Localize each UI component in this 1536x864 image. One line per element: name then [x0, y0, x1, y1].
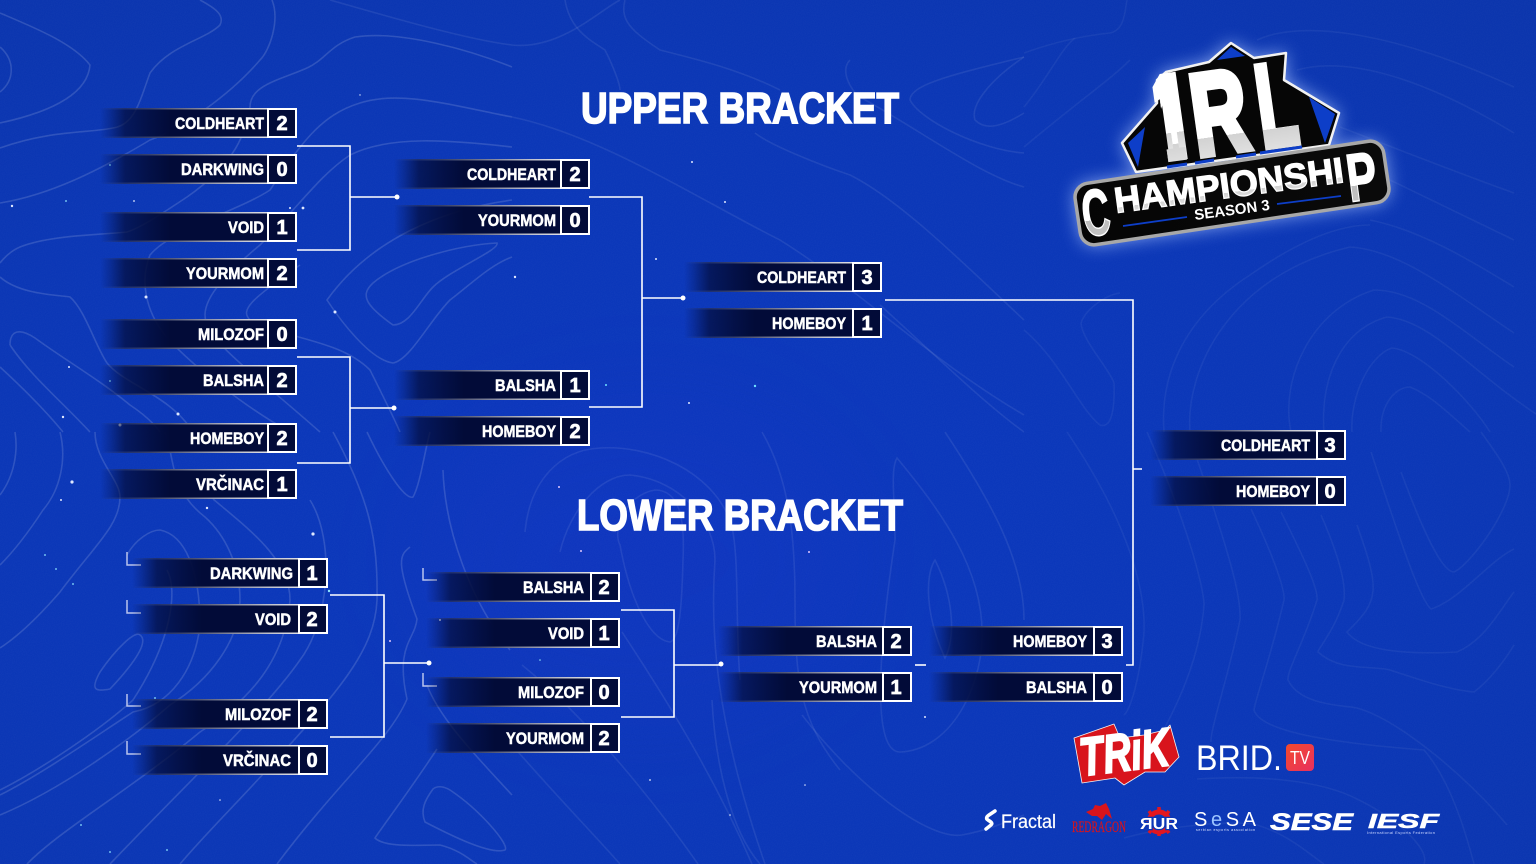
match row: Darkwing 1 [132, 558, 328, 588]
match row: Void 1: 1 [276, 217, 288, 239]
match row: Balsha 0: BALSHA [1026, 679, 1087, 697]
stars [11, 94, 926, 853]
match row: Homeboy 2: 2 [569, 421, 581, 443]
sponsor logo: Redragon [1072, 803, 1126, 836]
match row: Balsha 1 [394, 370, 590, 400]
match row: Homeboy 2: 2 [276, 428, 288, 450]
match row: Milozof 0: MILOZOF [198, 326, 264, 344]
match row: Homeboy 2: HOMEBOY [482, 423, 556, 441]
match row: Homeboy 2 [394, 416, 590, 446]
match row: Void 2: 2 [306, 609, 318, 631]
match row: Void 1 [426, 618, 620, 648]
match row: Darkwing 0 [100, 154, 297, 184]
logo: 1RL Championship Season 3: L [1248, 38, 1304, 172]
match row: Homeboy 0: 0 [1324, 481, 1336, 503]
match row: Void 2 [132, 604, 328, 634]
match row: Milozof 0: 0 [598, 682, 610, 704]
match row: Coldheart 2: 2 [276, 113, 288, 135]
match row: Vrčinac 0: 0 [306, 750, 318, 772]
match row: Coldheart 2: COLDHEART [467, 166, 556, 184]
logo: 1RL Championship Season 3: P [1342, 138, 1382, 217]
match row: Yourmom 0: 0 [569, 210, 581, 232]
match row: Coldheart 2: 2 [569, 164, 581, 186]
match row: Balsha 1: 1 [569, 375, 581, 397]
match row: Balsha 2: 2 [276, 370, 288, 392]
match row: Balsha 2: BALSHA [203, 372, 264, 390]
logo: 1RL Championship Season 3: SEASON 3 [1193, 197, 1271, 224]
logo: 1RL Championship Season 3 [1073, 38, 1391, 251]
match row: Balsha 2: 2 [598, 577, 610, 599]
match row: Darkwing 0: 0 [276, 159, 288, 181]
match row: Milozof 2: 2 [306, 704, 318, 726]
lower bracket round 2 [426, 572, 620, 753]
match row: Yourmom 0 [394, 205, 590, 235]
match row: Coldheart 2 [394, 159, 590, 189]
lower bracket final [929, 626, 1123, 702]
match row: Homeboy 1 [684, 308, 882, 338]
match row: Void 1 [100, 212, 297, 242]
upper bracket round 2 [394, 159, 590, 446]
sponsor logo: RUR: ЯUR [1140, 816, 1178, 833]
match row: Homeboy 3 [929, 626, 1123, 656]
match row: Vrčinac 1: VRČINAC [196, 475, 264, 494]
match row: Yourmom 1 [718, 672, 912, 702]
sponsor logo: SESE: SESE [1270, 809, 1354, 836]
grand final [1150, 430, 1346, 506]
match row: Milozof 0: 0 [276, 324, 288, 346]
match row: Yourmom 1: 1 [890, 677, 902, 699]
sponsor logo: Redragon: REDRAGON [1072, 819, 1126, 836]
logo: 1RL Championship Season 3: C [1077, 174, 1115, 251]
match row: Coldheart 3: 3 [1324, 435, 1336, 457]
match row: Coldheart 3: COLDHEART [757, 269, 846, 287]
match row: Milozof 0: MILOZOF [518, 684, 584, 702]
logo: 1RL Championship Season 3: 1 [1151, 55, 1191, 187]
match row: Coldheart 2: COLDHEART [175, 115, 264, 133]
match row: Balsha 2: BALSHA [523, 579, 584, 597]
corner marks: lower bracket drop-ins [127, 552, 437, 754]
contour lines: left [0, 0, 512, 864]
connectors: upper bracket round 1 [297, 146, 400, 463]
match row: Yourmom 2: 2 [276, 263, 288, 285]
match row: Balsha 2: 2 [890, 631, 902, 653]
match row: Homeboy 3: 3 [1101, 631, 1113, 653]
match row: Coldheart 2 [100, 108, 297, 138]
match row: Void 2: VOID [255, 611, 291, 629]
match row: Balsha 2 [718, 626, 912, 656]
lower bracket round 1 [132, 558, 328, 775]
match row: Homeboy 2: HOMEBOY [190, 430, 264, 448]
match row: Balsha 2 [426, 572, 620, 602]
match row: Yourmom 2 [426, 723, 620, 753]
match row: Milozof 0 [100, 319, 297, 349]
sponsor logo: SESA: SeSA [1194, 809, 1257, 831]
heading: lower bracket: LOWER BRACKET [577, 491, 903, 540]
match row: Darkwing 1: 1 [306, 563, 318, 585]
match row: Yourmom 2: 2 [598, 728, 610, 750]
connectors: upper bracket round 2 [589, 197, 686, 407]
connectors: lower bracket [330, 595, 926, 737]
connector: upper final to grand final [885, 300, 1142, 665]
match row: Balsha 2: BALSHA [816, 633, 877, 651]
match row: Balsha 1: BALSHA [495, 377, 556, 395]
match row: Darkwing 1: DARKWING [210, 565, 293, 583]
match row: Coldheart 3: 3 [861, 267, 873, 289]
match row: Darkwing 0: DARKWING [181, 161, 264, 179]
contour lines: right [1024, 0, 1536, 864]
match row: Vrčinac 1 [100, 469, 297, 499]
match row: Homeboy 1: HOMEBOY [772, 315, 846, 333]
contour lines: centre [330, 0, 1024, 864]
sponsor logo: IESF [1367, 811, 1440, 835]
match row: Yourmom 0: YOURMOM [478, 212, 556, 230]
lower bracket round 3 [718, 626, 912, 702]
sponsor logo: SESA: serbian esports association [1196, 828, 1255, 832]
upper bracket round 1 [100, 108, 297, 499]
sponsor logo: Brid.TV: BRID. [1196, 739, 1282, 778]
match row: Homeboy 3: HOMEBOY [1013, 633, 1087, 651]
sponsor logo: IESF: IESF [1368, 811, 1440, 833]
match row: Homeboy 0 [1150, 476, 1346, 506]
sponsor logo: IESF: International Esports Federation [1367, 830, 1435, 835]
heading: upper bracket: UPPER BRACKET [581, 84, 899, 133]
match row: Coldheart 3 [1150, 430, 1346, 460]
match row: Yourmom 2 [100, 258, 297, 288]
match row: Homeboy 1: 1 [861, 313, 873, 335]
match row: Void 1: 1 [598, 623, 610, 645]
logo: 1RL Championship Season 3: HAMPIONSHI [1112, 149, 1346, 221]
match row: Void 1: VOID [548, 625, 584, 643]
logo: 1RL Championship Season 3: R [1182, 44, 1256, 181]
match row: Homeboy 2 [100, 423, 297, 453]
match row: Yourmom 2: YOURMOM [186, 265, 264, 283]
match row: Void 1: VOID [228, 219, 264, 237]
upper bracket final [684, 262, 882, 338]
sponsor logo: Brid.TV: TV [1290, 748, 1310, 768]
match row: Milozof 2: MILOZOF [225, 706, 291, 724]
match row: Yourmom 1: YOURMOM [799, 679, 877, 697]
sponsor logo: RUR [1140, 807, 1178, 836]
match row: Vrčinac 0 [132, 745, 328, 775]
match row: Coldheart 3 [684, 262, 882, 292]
match row: Balsha 2 [100, 365, 297, 395]
sponsor logo: Fractal: Fractal [1001, 812, 1056, 833]
match row: Balsha 0: 0 [1101, 677, 1113, 699]
sponsor logo: Trik: TRiK [1076, 717, 1176, 788]
match row: Yourmom 2: YOURMOM [506, 730, 584, 748]
match row: Homeboy 0: HOMEBOY [1236, 483, 1310, 501]
match row: Balsha 0 [929, 672, 1123, 702]
match row: Milozof 2 [132, 699, 328, 729]
match row: Milozof 0 [426, 677, 620, 707]
match row: Coldheart 3: COLDHEART [1221, 437, 1310, 455]
match row: Vrčinac 1: 1 [276, 474, 288, 496]
match row: Vrčinac 0: VRČINAC [223, 751, 291, 770]
